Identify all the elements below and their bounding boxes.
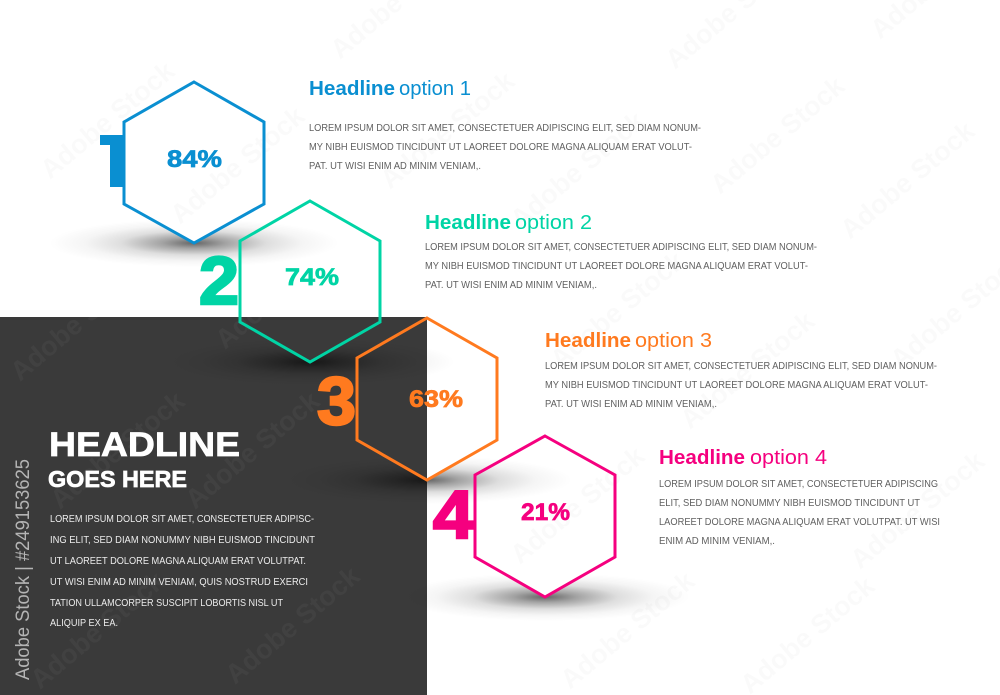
main body text: ALIQUIP EX EA. — [50, 618, 118, 629]
shadow: hexagon 1 — [79, 225, 309, 262]
heading: option 3 — [545, 330, 712, 352]
main heading: GOES HERE — [48, 466, 187, 492]
dark panel — [0, 317, 427, 695]
shadow: hexagon 4 — [430, 579, 660, 616]
step 4 graphic — [433, 436, 615, 597]
body: option 2 — [425, 242, 817, 291]
heading: option 2 — [425, 212, 592, 234]
body: option 3 — [545, 361, 937, 410]
main body text — [50, 514, 315, 629]
number 3: 3 — [317, 363, 356, 439]
main body text: TATION ULLAMCORPER SUSCIPIT LOBORTIS NISL UT — [50, 598, 283, 609]
stock id vertical label: Adobe Stock | #249153625 — [13, 459, 34, 680]
step 2 graphic — [199, 201, 380, 362]
hexagon 4 outline — [475, 436, 615, 597]
watermark pattern: Adobe Stock — [220, 560, 366, 690]
body: option 1: PAT. UT WISI ENIM AD MINIM VENIAM,. — [309, 161, 481, 172]
body: option 4: LAOREET DOLORE MAGNA ALIQUAM ERAT VOLUTPAT. UT WISI — [659, 517, 940, 528]
heading: option 3: option 3 — [635, 330, 712, 352]
heading: option 3: Headline — [545, 330, 631, 352]
number 4: 4 — [433, 477, 474, 553]
text block: option 2 — [425, 212, 817, 291]
main body text: UT WISI ENIM AD MINIM VENIAM, QUIS NOSTRUD EXERCI — [50, 577, 308, 588]
number 2: 2 — [199, 243, 239, 319]
main body text: UT LAOREET DOLORE MAGNA ALIQUAM ERAT VOLUTPAT. — [50, 556, 306, 567]
percentage 21%: 21% — [521, 499, 570, 526]
body: option 3: MY NIBH EUISMOD TINCIDUNT UT LAOREET DOLORE MAGNA ALIQUAM ERAT VOLUT- — [545, 380, 928, 391]
watermark pattern: Adobe Stock — [45, 385, 191, 515]
number 1: 1 — [78, 123, 138, 203]
watermark pattern: Adobe Stock — [5, 257, 151, 387]
heading: option 4: Headline — [659, 447, 745, 469]
main heading — [48, 426, 240, 492]
body: option 4: ELIT, SED DIAM NONUMMY NIBH EUISMOD TINCIDUNT UT — [659, 498, 920, 509]
body: option 1 — [309, 123, 701, 172]
text block: option 1 — [309, 78, 701, 172]
body: option 2: MY NIBH EUISMOD TINCIDUNT UT LAOREET DOLORE MAGNA ALIQUAM ERAT VOLUT- — [425, 261, 808, 272]
text block: option 3 — [545, 330, 937, 410]
body: option 1: LOREM IPSUM DOLOR SIT AMET, CONSECTETUER ADIPISCING ELIT, SED DIAM NONUM- — [309, 123, 701, 134]
hexagon 3 outline — [357, 318, 497, 480]
shadow: hexagon 3 — [358, 462, 542, 499]
body: option 3: LOREM IPSUM DOLOR SIT AMET, CONSECTETUER ADIPISCING ELIT, SED DIAM NONUM- — [545, 361, 937, 372]
step 3 graphic — [317, 318, 497, 480]
heading: option 4 — [659, 447, 827, 469]
heading: option 2: Headline — [425, 212, 511, 234]
percentage 74%: 74% — [285, 264, 339, 291]
percentage 63%: 63% — [409, 386, 463, 413]
body: option 4: ENIM AD MINIM VENIAM,. — [659, 536, 775, 547]
shadow: hexagon 2 — [240, 351, 380, 374]
body: option 4 — [659, 479, 940, 547]
percentage 84%: 84% — [167, 146, 222, 173]
hexagon 2 outline — [240, 201, 380, 362]
body: option 1: MY NIBH EUISMOD TINCIDUNT UT LAOREET DOLORE MAGNA ALIQUAM ERAT VOLUT- — [309, 142, 692, 153]
body: option 2: LOREM IPSUM DOLOR SIT AMET, CONSECTETUER ADIPISCING ELIT, SED DIAM NONUM- — [425, 242, 817, 253]
main body text: ING ELIT, SED DIAM NONUMMY NIBH EUISMOD TINCIDUNT — [50, 535, 315, 546]
body: option 2: PAT. UT WISI ENIM AD MINIM VENIAM,. — [425, 280, 597, 291]
heading: option 4: option 4 — [750, 447, 827, 469]
hexagon 1 outline — [124, 82, 264, 243]
heading: option 1: Headline — [309, 78, 395, 100]
watermark pattern: Adobe Stock — [25, 565, 171, 695]
body: option 4: LOREM IPSUM DOLOR SIT AMET, CONSECTETUER ADIPISCING — [659, 479, 938, 490]
text block: option 4 — [659, 447, 940, 547]
watermark pattern: Adobe Stock — [210, 225, 356, 355]
heading: option 2: option 2 — [515, 212, 592, 234]
body: option 3: PAT. UT WISI ENIM AD MINIM VENIAM,. — [545, 399, 717, 410]
main heading: HEADLINE — [49, 426, 240, 464]
heading: option 1: option 1 — [399, 78, 471, 100]
main body text: LOREM IPSUM DOLOR SIT AMET, CONSECTETUER ADIPISC- — [50, 514, 314, 525]
step 1 graphic — [78, 82, 264, 243]
heading: option 1 — [309, 78, 471, 100]
watermark pattern: Adobe Stock — [180, 385, 326, 515]
